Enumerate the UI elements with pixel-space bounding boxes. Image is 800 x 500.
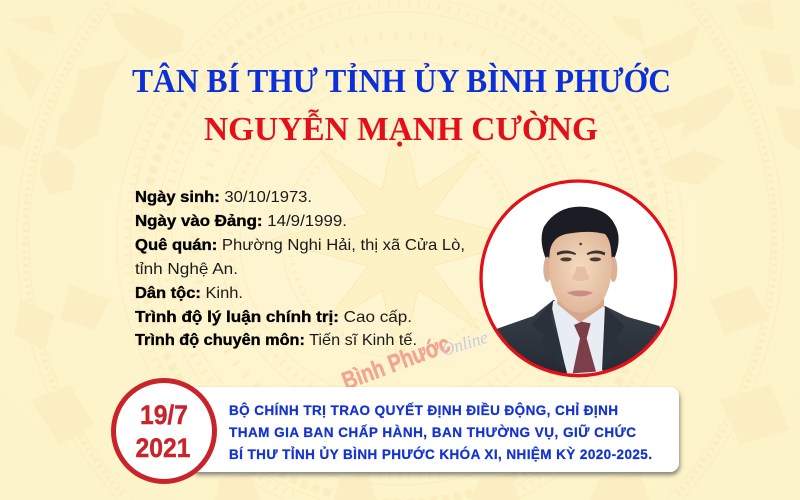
biography text [135, 189, 465, 349]
suit [497, 300, 660, 374]
announcement text: BỘ CHÍNH TRỊ TRAO QUYẾT ĐỊNH ĐIỀU ĐỘNG, CHỈ ĐỊNH [229, 403, 618, 418]
neck [557, 298, 604, 322]
date badge: 2021 [136, 433, 190, 463]
announcement text: THAM GIA BAN CHẤP HÀNH, BAN THƯỜNG VỤ, GIỮ CHỨC [229, 425, 636, 440]
tie [573, 322, 596, 373]
biography text: tỉnh Nghệ An. [135, 261, 238, 278]
portrait photo [480, 181, 677, 376]
lapels [532, 300, 567, 373]
shirt [551, 298, 605, 373]
announcement box [190, 387, 679, 472]
title [132, 62, 671, 148]
ears [543, 256, 550, 282]
biography text: Ngày sinh: 30/10/1973. [135, 189, 312, 206]
announcement text: BÍ THƯ TỈNH ỦY BÌNH PHƯỚC KHÓA XI, NHIỆM KỲ 2020-2025. [229, 447, 652, 462]
name: NGUYỄN MẠNH CƯỜNG [204, 109, 598, 148]
eyes and brows [557, 250, 576, 255]
date badge [114, 380, 214, 482]
biography text: Ngày vào Đảng: 14/9/1999. [135, 213, 347, 230]
hair back [542, 207, 619, 259]
biography text: Dân tộc: Kinh. [135, 285, 243, 302]
biography text: Trình độ lý luận chính trị: Cao cấp. [135, 309, 412, 326]
nose [572, 267, 590, 281]
mouth [567, 290, 593, 296]
announcement text [229, 403, 652, 462]
date badge: 19/7 [140, 400, 188, 430]
biography text: Quê quán: Phường Nghi Hải, thị xã Cửa Lò, [135, 237, 465, 254]
title: TÂN BÍ THƯ TỈNH ỦY BÌNH PHƯỚC [132, 62, 671, 100]
face [549, 232, 612, 313]
watermark: Online [439, 327, 490, 360]
biography text: Trình độ chuyên môn: Tiến sĩ Kinh tế. [135, 332, 417, 349]
watermark: Bình Phước [338, 330, 454, 396]
